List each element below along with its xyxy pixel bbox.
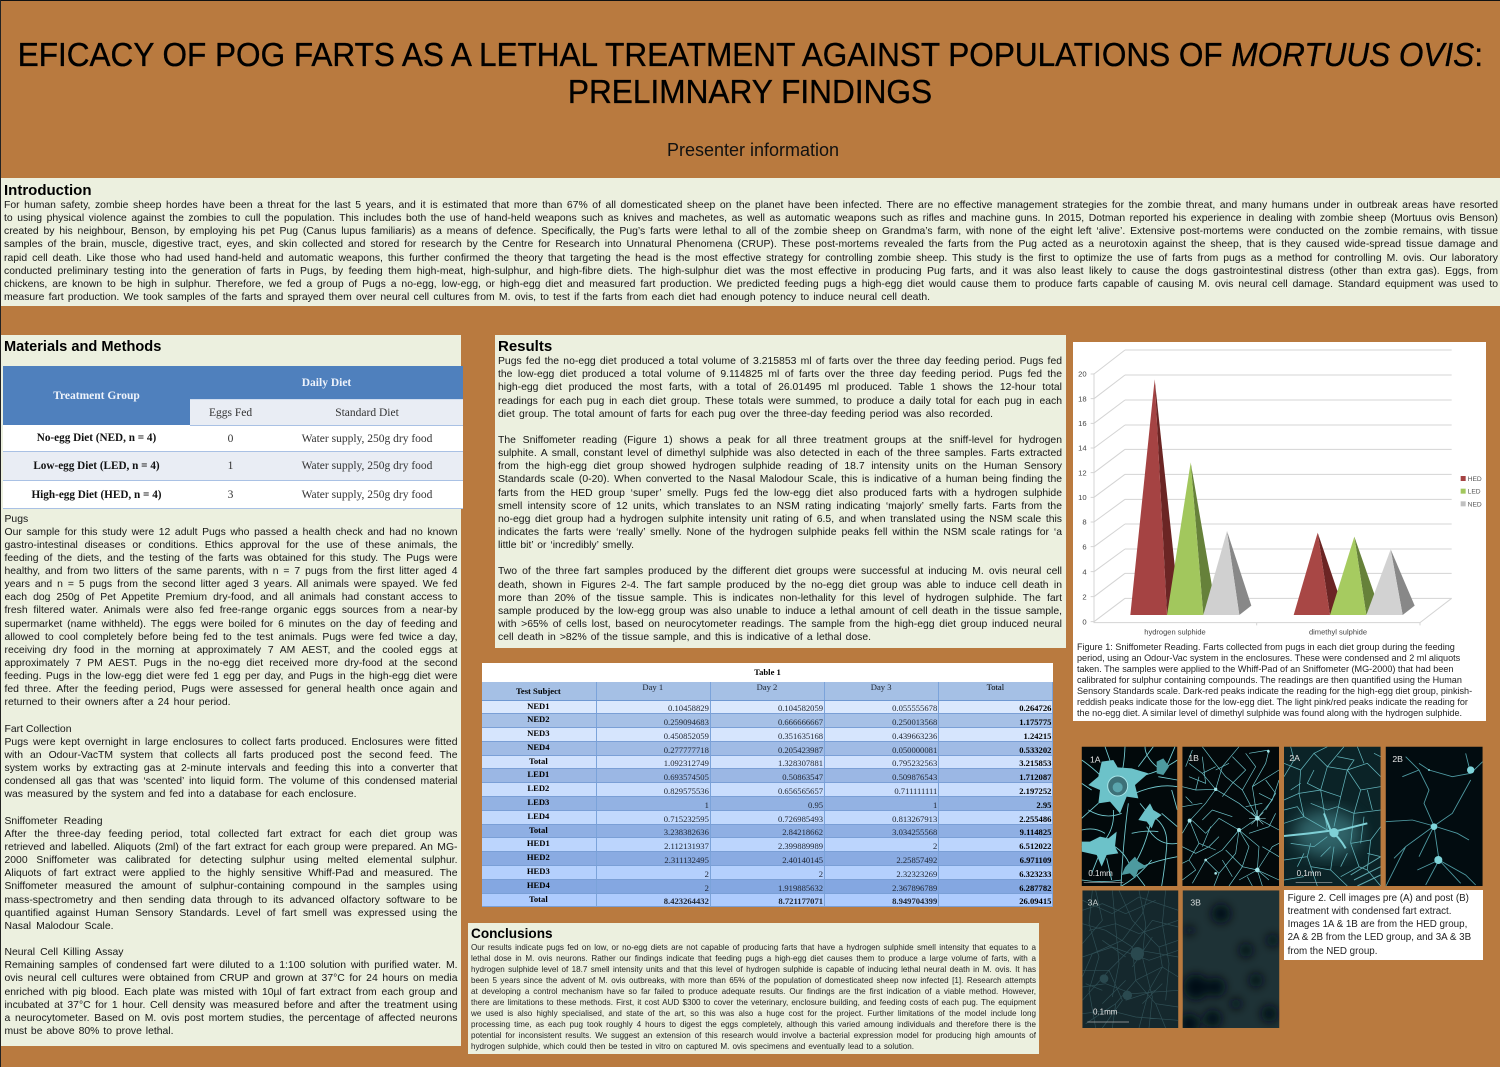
- table 1: readings: HED2: [527, 852, 550, 862]
- figure 2 caption: Images 1A & 1B are from the HED group,: [1288, 919, 1467, 930]
- table 1: readings: 1.24215: [1024, 731, 1051, 741]
- table 1: readings: 0.277777718: [664, 745, 709, 755]
- image 2A: 2A: [1289, 753, 1300, 763]
- axis labels: [1078, 370, 1087, 626]
- table 1: readings: Test Subject: [516, 686, 561, 696]
- table: treatment groups: Water supply, 250g dry food: [302, 432, 432, 444]
- table 1: readings: 0.264726: [1019, 703, 1051, 713]
- category labels: [1144, 627, 1367, 636]
- text: methods body: retrieved and labelled. Aliquots (2ml) of the fart extract for each group were prepared. An MG-: [4, 842, 458, 853]
- table 1: readings: Day 2: [757, 682, 777, 692]
- axis labels: 4: [1082, 567, 1087, 576]
- table 1: readings: 2.197252: [1019, 786, 1051, 796]
- image 3B: [1182, 890, 1280, 1028]
- text: methods body: Pugs were kept overnight in large enclosures to collect farts produced. Enclosures were fitted: [4, 737, 458, 748]
- text: results body: sulphite. A small, constant level of dimethyl sulphide was also detected in each of the three samples. Farts extracted: [498, 448, 1062, 459]
- table 1: readings: NED1: [527, 700, 550, 710]
- text: results body: death, shown in Figures 2-4. The fart sample produced by the no-egg diet group was able to induce cell death in: [498, 580, 1062, 591]
- table 1: readings: 8.423264432: [664, 896, 709, 906]
- axis labels: 2: [1082, 592, 1087, 601]
- axis labels: 6: [1082, 542, 1087, 551]
- table 1: readings: 0.711111111: [894, 786, 937, 796]
- axis labels: 20: [1078, 370, 1087, 379]
- table 1: readings: HED3: [527, 866, 550, 876]
- table 1: readings: 6.512022: [1019, 841, 1051, 851]
- text: results body: Pugs fed the no-egg diet produced a total volume of 3.215853 ml of farts over the three day feeding period. Pugs fed: [498, 356, 1062, 367]
- table 1: readings: 0.95: [808, 800, 823, 810]
- text: methods body: Pugs: [4, 514, 28, 524]
- pyramids: hydrogen sulphide: [1130, 379, 1251, 615]
- table 1: readings: LED2: [527, 783, 549, 793]
- table 1: readings: 2: [819, 869, 823, 879]
- text: methods body: Fart Collection: [4, 724, 72, 735]
- text: methods body: allowed to cool completely before being fed to the test animals. Pugs were fed twice a day,: [4, 632, 458, 643]
- table 1: readings: LED1: [527, 769, 549, 779]
- figure 1 caption: reddish peaks indicate those for the low-egg diet. The light pink/red peaks indicate the reading for: [1077, 697, 1468, 707]
- table 1: readings: LED3: [527, 797, 549, 807]
- table 1: readings: 6.287782: [1019, 883, 1051, 893]
- text: methods body: incubated at 37°C for 1 hour. Cell density was measured before and after the treatment using: [4, 1000, 458, 1011]
- text: results body: Two of the three fart samples produced by the different diet groups were successful at inducing M. ovis neural cell: [498, 566, 1062, 577]
- text: conclusions body: we used is also highly specialised, and state of the art, so this was also a huge cost for the project. Further limitations of the model include long: [471, 1009, 1036, 1018]
- text: methods body: supermarket (name withheld). The eggs were boiled for 6 minutes on the day of feeding and: [4, 619, 458, 630]
- table 1: readings: 2: [705, 869, 709, 879]
- text: introduction body: measure fart production. We took samples of the farts and sprayed them over neural cell cultures from M. ovis, to test if the farts from each diet had enough potency to induce neural cell death.: [4, 292, 930, 303]
- figure 1 caption: calibrated for sulphur containing compounds. The readings are then quantified using the Human: [1077, 675, 1462, 685]
- text: methods body: receiving dry food in the morning at approximately 7 AM AEST, and the cooled eggs at: [4, 645, 458, 656]
- text: methods body: Our sample for this study were 12 adult Pugs who passed a health check and had no known: [4, 527, 458, 538]
- table: treatment groups: No-egg Diet (NED, n = 4): [37, 432, 156, 444]
- image 2B: 2B: [1392, 754, 1403, 764]
- text: results body: the low-egg diet produced a total volume of 9.114825 ml of farts over the three day feeding period. Pugs fed the: [498, 369, 1062, 380]
- text: introduction body: to using physical violence against the zombies to cull the population. This includes both the use of hand-held weapons such as knives and machetes, as well as automatic weapons such as rifles and machine guns. In 2015, Dotman reported his experience in dealing with zombie sheep (Mortuus ovis Benson): [4, 213, 1498, 224]
- table 1: readings: 26.09415: [1019, 896, 1051, 906]
- table: treatment groups: 3: [228, 488, 233, 500]
- table: treatment groups: Water supply, 250g dry food: [302, 488, 432, 500]
- figure 2: neuron micrographs: [1082, 746, 1483, 1028]
- text: introduction body: [4, 200, 1498, 303]
- text: methods body: Remaining samples of condensed fart were diluted to a 1:100 solution with purified water. M.: [4, 960, 458, 971]
- image 3A: 3A: [1088, 897, 1098, 907]
- table 1: readings: 6.323233: [1019, 869, 1051, 879]
- table: treatment groups: 0: [228, 432, 233, 444]
- text: methods body: Neural Cell Killing Assay: [4, 947, 124, 958]
- table 1: readings: 2.399889989: [778, 841, 823, 851]
- text: methods body: enriched with pig blood. Each plate was misted with 10µl of fart extract from each group and: [4, 987, 458, 998]
- table 1: readings: 0.10458829: [668, 703, 709, 713]
- table 1 title: Table 1: [754, 667, 781, 677]
- table 1: readings: 2.84218662: [782, 827, 823, 837]
- title: [18, 36, 1483, 110]
- text: conclusions body: hydrogen sulphide level of 18.7 smell intensity units and that this level of hydrogen sulphide is capable of inducing lethal neural death in M. ovis. It has: [471, 965, 1036, 974]
- figure 2 caption: treatment with condensed fart extract.: [1288, 906, 1452, 917]
- pyramids: dimethyl sulphide: [1294, 533, 1415, 615]
- table 1: readings: 0.726985493: [778, 814, 823, 824]
- text: conclusions body: Our results indicate pugs fed on low, or no-egg diets are not capable of producing farts that have a hydrogen sulphide smell intensity that equates to a: [471, 943, 1036, 952]
- text: conclusions body: at developing a control mechanism have so far failed to produce adequate results. Our findings are the first indication of a viable method. However,: [471, 987, 1036, 996]
- axis labels: 10: [1078, 493, 1087, 502]
- text: methods body: [4, 514, 458, 1037]
- table 1: readings: 2.95: [1036, 800, 1051, 810]
- text: methods body: was measured by the system and fed into a database for each enclosure.: [4, 789, 356, 800]
- text: methods body: gastro-intestinal diseases or conditions. Ethics approval for the use of these animals, the: [4, 540, 458, 551]
- panel: materials and methods: [1, 335, 461, 1046]
- table 1: readings: 0.450852059: [664, 731, 709, 741]
- text: introduction body: For human safety, zombie sheep hordes have been a threat for the last 5 years, and it is estimated that more than 67% of all domesticated sheep on the planet have been infected. There are no effective management strategies for the zombie threat, and many humans under in outbreak areas have resorted: [4, 200, 1498, 211]
- table 1: readings: 0.50863547: [782, 772, 823, 782]
- text: results body: high-egg diet produced the most farts, with a total of 26.01495 ml produced. Table 1 shows the 12-hour total: [498, 382, 1062, 393]
- table: treatment groups: Water supply, 250g dry food: [302, 460, 432, 472]
- table 1: readings: 0.533202: [1019, 745, 1051, 755]
- table 1: readings: 0.439663236: [892, 731, 937, 741]
- text: results body: farts from the HED group ‘super’ smelly. Pugs fed the low-egg diet also produced farts with a hydrogen sulphide: [498, 488, 1062, 499]
- image 2A: [1284, 746, 1381, 886]
- table 1: readings: Total: [529, 756, 548, 766]
- table 1: readings: LED4: [527, 811, 549, 821]
- table 1: readings: 1.712087: [1019, 772, 1051, 782]
- text: results body: indicates the farts were ‘really’ smelly. None of the hydrogen sulphide peaks fell within the NSM scale ratings for ‘a: [498, 527, 1062, 538]
- text: methods body: years and n = 5 pugs from the second litter aged 3 years. All animals were spayed. We fed: [4, 579, 458, 590]
- legend: [1461, 476, 1482, 508]
- text: introduction body: conducted preliminary testing into the generation of farts in Pugs, by feeding them high-meat, high-sulphur, and high-fibre diets. The high-sulphur diet was the most effective in producing Pug farts, and it was also least likely to cause the dogs gastrointestinal distress (other than extra gas). Eggs, from: [4, 266, 1498, 277]
- page frame lines: [0, 0, 1500, 1]
- image 1A: [1082, 746, 1178, 886]
- image 1B: [1182, 746, 1279, 886]
- text: results body: [498, 356, 1062, 643]
- image 1B: 1B: [1188, 753, 1199, 763]
- text: conclusions body: been 5 years since the advent of M. ovis outbreaks, with more than 65% of the population of domesticated sheep now infected [1]. Research attempts: [471, 976, 1036, 985]
- table 1: readings: HED1: [527, 838, 550, 848]
- image 1A: 0.1mm: [1088, 869, 1113, 878]
- table: treatment groups: Eggs Fed: [209, 406, 252, 418]
- image 2A: 0.1mm: [1297, 869, 1321, 878]
- image 2B: [1386, 746, 1483, 886]
- axis labels: 18: [1078, 394, 1087, 403]
- title: PRELIMNARY FINDINGS: [568, 73, 932, 110]
- figure 2 caption: 2A & 2B from the LED group, and 3A & 3B: [1288, 932, 1471, 943]
- table: treatment groups: Daily Diet: [302, 377, 351, 389]
- figure 1 caption: Figure 1: Sniffometer Reading. Farts collected from pugs in each diet group during the feeding: [1077, 642, 1455, 652]
- legend: HED: [1468, 476, 1482, 483]
- table 1: readings: 2.367896789: [892, 883, 937, 893]
- legend: LED: [1468, 489, 1481, 496]
- table 1: readings: 0.205423987: [778, 745, 823, 755]
- text: methods body: feeding of the diets, and the testing of the farts was obtained for this study. The Pugs were: [4, 553, 458, 564]
- text: conclusions body: [471, 943, 1036, 1051]
- table 1: readings: 1.919885632: [778, 883, 823, 893]
- table 1: readings: 9.114825: [1020, 827, 1051, 837]
- legend: NED: [1468, 501, 1482, 508]
- text: introduction body: chickens, are known to be high in sulphur. Therefore, we fed a group of Pugs a no-egg, low-egg, or high-egg diet and measured fart production. We predicted feeding pugs a high-egg diet would cause them to produce farts capable of causing M. ovis neural cell damage. Standard equipment was used to: [4, 279, 1498, 290]
- table 1: readings: 0.055555678: [892, 703, 937, 713]
- table 1: readings: 2: [933, 841, 937, 851]
- table 1: readings: 0.050000081: [892, 745, 937, 755]
- table 1: readings: Day 1: [642, 682, 663, 692]
- table 1: readings: 3.034255568: [892, 827, 937, 837]
- table: treatment groups: Standard Diet: [335, 406, 399, 418]
- table 1: readings: 0.795232563: [892, 758, 937, 768]
- figure 2 caption: Figure 2. Cell images pre (A) and post (B): [1288, 893, 1469, 904]
- text: methods body: ovis neural cell cultures were obtained from CRUP and grown at 37°C for 24 hours on media: [4, 973, 458, 984]
- table 1: readings: 0.250013568: [892, 717, 937, 727]
- figure 1 caption: taken. The samples were applied to the Whiff-Pad of an Sniffometer (MG-2000) that had been: [1077, 664, 1453, 674]
- table 1: readings: 6.971109: [1020, 855, 1051, 865]
- axis labels: 16: [1078, 419, 1087, 428]
- text: conclusions body: processing time, as each pug took roughly 4 hours to digest the eggs completely, although this varied amoung individuals and therefore there is the: [471, 1020, 1036, 1029]
- text: methods body: quantified against Human Sensory Standards. Level of fart smell was expressed using the: [4, 908, 458, 919]
- presenter information: Presenter information: [667, 140, 839, 160]
- table 1: readings: 0.829575536: [664, 786, 709, 796]
- text: methods body: returned to their owners after a 24 hour period.: [4, 697, 230, 708]
- table 1: readings: 0.693574505: [664, 772, 709, 782]
- table 1: readings: 1.092312749: [664, 758, 709, 768]
- table 1: readings: 2.25857492: [896, 855, 937, 865]
- text: results body: cell death in >82% of the tissue sample, and this is indicative of a lethal dose.: [498, 632, 871, 643]
- table 1: readings: 3.238382636: [664, 827, 709, 837]
- table 1: readings: NED2: [527, 714, 550, 724]
- text: introduction body: samples of the brain, muscle, digestive tract, eyes, and skin collected and stored for research by the Centre for Research into Unnatural Phenomena (CRUP). These post-mortems revealed the farts from the Pug acted as a neurotoxin against the sheep, that is they caused wide-spread tissue damage and: [4, 239, 1498, 250]
- text: results body: Standards scale (0-20). When converted to the Nasal Malodour Scale, this is indicative of a human being finding the: [498, 474, 1062, 485]
- table 1: readings: 2.32323269: [896, 869, 937, 879]
- text: methods body: fresh filtered water. Animals were also fed free-range organic eggs sources from a near-by: [4, 605, 458, 616]
- image 3A: 0.1mm: [1093, 1007, 1118, 1016]
- table 1: readings: NED3: [527, 728, 550, 738]
- text: methods body: approximately 7 PM AEST. Pugs in the no-egg diet received more dry-food at the second: [4, 658, 458, 669]
- category labels: dimethyl sulphide: [1309, 627, 1367, 636]
- table 1: readings: Total: [987, 682, 1004, 692]
- table 1: readings: [482, 682, 1053, 907]
- text: methods body: Nasal Malodour Scale.: [4, 921, 114, 932]
- image 3A: [1082, 890, 1178, 1028]
- text: results body: diet group. The total amount of farts for each pug over the three-day feeding period was also recorded.: [498, 409, 993, 420]
- text: methods body: each dog 250g of Pet Appetite Premium dry-food, and all animals had constant access to: [4, 592, 458, 603]
- table 1: readings: 0.259094683: [664, 717, 709, 727]
- text: methods body: with an Odour-VacTM system that collects all farts produced post the second feed. The: [4, 750, 458, 761]
- table 1: readings: Total: [529, 894, 548, 904]
- table 1: readings: 0.666666667: [778, 717, 823, 727]
- figure 1 caption: period, using an Odour-Vac system in the enclosures. These were condensed and 2 ml aliquots: [1077, 653, 1460, 663]
- heading: materials and methods: Materials and Methods: [4, 339, 161, 355]
- text: introduction body: created by his neighbour, Benson, by employing his pet Pug (Canus lupus familiaris) as a means of defence. Specifically, the Pug’s farts were lethal to all of the zombie sheep on Grandma’s farm, with none of the eight left ‘alive’. Extensive post-mortems were conducted on the zombie remains, with tissue: [4, 226, 1498, 237]
- heading: results: Results: [498, 338, 552, 355]
- text: results body: smell intensity score of 12 units, which translates to an NSM rating indicating ‘majorly’ smelly farts. Farts from the: [498, 501, 1062, 512]
- text: methods body: mass-spectrometry and then sending data through to its advanced olfactory software to be: [4, 895, 458, 906]
- text: results body: little bit’ or ‘incredibly’ smelly.: [498, 540, 634, 551]
- table 1: readings: 2.311132495: [664, 855, 709, 865]
- table 1: readings: 0.715232595: [664, 814, 709, 824]
- text: introduction body: rapid cell death. Like those who had used hand-held and automatic weapons, this further confirmed the theory that targeting the head is the most effective strategy for controlling zombie sheep. This study is the first to optimize the use of farts from pugs as a method for controlling M. ovis. Our laboratory: [4, 253, 1498, 264]
- text: methods body: feeding. Pugs in the low-egg diet were fed 1 egg per day, and Pugs in the high-egg diet were: [4, 671, 458, 682]
- heading: conclusions: Conclusions: [471, 926, 553, 941]
- table 1: readings: Day 3: [871, 682, 892, 692]
- table 1: readings: 1: [705, 800, 709, 810]
- text: results body: sample produced by the low-egg group was also unable to induce a lethal amount of cell death in the tissue sample,: [498, 606, 1062, 617]
- table 1: readings: Total: [529, 825, 548, 835]
- figure 2 caption: from the NED group.: [1288, 946, 1377, 957]
- text: conclusions body: potential for inconsistent results. We suggest an extension of this research would involve a bacterial expression model for producing high amounts of: [471, 1031, 1036, 1040]
- table 1: readings: 3.215853: [1019, 758, 1051, 768]
- table 1: readings: 0.509876543: [892, 772, 937, 782]
- title: EFICACY OF POG FARTS AS A LETHAL TREATMENT AGAINST POPULATIONS OF MORTUUS OVIS:: [18, 36, 1483, 73]
- table 1: readings: 0.813267913: [892, 814, 937, 824]
- figure 1 caption: Sensory Standards scale. Dark-red peaks indicate the reading for the high-egg diet group, pinkish-: [1077, 686, 1472, 696]
- text: methods body: must be above 80% to prove lethal.: [4, 1026, 174, 1037]
- text: methods body: system works by extracting gas at 2-minute intervals and feeding this into a converter that: [4, 763, 458, 774]
- table: treatment groups: High-egg Diet (HED, n = 4): [31, 488, 162, 500]
- image 3B: 3B: [1190, 898, 1201, 908]
- axis labels: 12: [1078, 468, 1087, 477]
- axis labels: 14: [1078, 444, 1087, 453]
- text: methods body: a neurocytometer. Based on M. ovis post mortem studies, the percentage of affected neurons: [4, 1013, 458, 1024]
- table 1: readings: 2: [705, 883, 709, 893]
- table 1: readings: 8.721177071: [778, 896, 823, 906]
- text: methods body: Sniffometer measured the amount of sulphur-containing compound in the samples using: [4, 881, 458, 892]
- heading: introduction: Introduction: [4, 182, 91, 199]
- table: treatment groups: Treatment Group: [53, 390, 140, 402]
- panel: introduction: [1, 178, 1500, 306]
- table 1: readings: 0.656565657: [778, 786, 823, 796]
- text: results body: readings for each pug in each diet group. These totals were summed, to produce a daily total for each pug in each: [498, 396, 1062, 407]
- table 1: readings: NED4: [527, 742, 550, 752]
- table 1: readings: 1: [933, 800, 937, 810]
- chart: sniffometer 3D pyramids: [1078, 350, 1482, 636]
- text: conclusions body: lethal dose in M. ovis neurons. Rather our findings indicate that feeding pugs a high-egg diet causes them to produce a large volume of farts, with a: [471, 954, 1036, 963]
- axis labels: 0: [1082, 617, 1087, 626]
- text: methods body: Aliquots of fart extract were applied to the highly sensitive Whiff-Pad and measured. The: [4, 868, 458, 879]
- table: treatment groups: Low-egg Diet (LED, n = 4): [33, 460, 160, 472]
- text: methods body: After the three-day feeding period, total collected fart extract for each diet group was: [4, 829, 458, 840]
- table: treatment groups: 1: [228, 460, 233, 472]
- image 1A: 1A: [1090, 754, 1101, 764]
- text: methods body: Sniffometer Reading: [4, 816, 102, 827]
- table: treatment groups: [3, 366, 463, 508]
- table 1: readings: 1.175775: [1019, 717, 1051, 727]
- text: results body: no-egg diet group had a hydrogen sulphite intensity unit rating of 6.5, and when translated using the NSM scale this: [498, 514, 1062, 525]
- panel: figure 1 chart and caption: [1073, 342, 1486, 721]
- text: results body: The Sniffometer reading (Figure 1) shows a peak for all three treatment groups at the sniff-level for hydrogen: [498, 435, 1062, 446]
- text: results body: from the high-egg diet group showed hydrogen sulphide reading of 18.7 intensity units on the Human Sensory: [498, 461, 1062, 472]
- table 1: readings: 8.949704399: [892, 896, 937, 906]
- text: conclusions body: there are limitations to these methods. First, it cost AUD $300 to cover the veterinary, enclosure building, and feeding costs of each pug. The equipment: [471, 998, 1036, 1007]
- table 1: readings: HED4: [527, 880, 550, 890]
- text: methods body: healthy, and from two litters of the same parents, with n = 7 pugs from the first litter aged 4: [4, 566, 458, 577]
- table 1 title: [482, 663, 1053, 682]
- figure 1 caption: the no-egg diet. A similar level of dimethyl sulphide was found along with the hydrogen sulphide.: [1077, 708, 1462, 718]
- table 1: readings: 0.104582059: [778, 703, 823, 713]
- text: conclusions body: hydrogen sulphide, which could then be tested in vitro on captured M. ovis specimens and eventually lead to a solution.: [471, 1042, 914, 1051]
- table 1: readings: 2.255486: [1019, 814, 1051, 824]
- figure 2 caption: [1284, 890, 1483, 960]
- text: methods body: condensed all gas that was ‘scented’ into liquid form. The volume of this condensed material: [4, 776, 458, 787]
- text: methods body: 2000 Sniffometer was calibrated for detecting sulphur using melted elemental sulphur.: [4, 855, 458, 866]
- text: results body: with >65% of cells lost, based on neurocytometer readings. The sample from the high-egg diet group induced neural: [498, 619, 1062, 630]
- table 1: readings: 2.112131937: [664, 841, 709, 851]
- table 1: readings: 1.328307881: [778, 758, 823, 768]
- figure 1 caption: [1077, 642, 1472, 718]
- table 1: readings: 0.351635168: [778, 731, 823, 741]
- text: methods body: fed three. After the feeding period, Pugs were assessed for general health once again and: [4, 684, 458, 695]
- category labels: hydrogen sulphide: [1144, 627, 1206, 636]
- table 1: readings: 2.40140145: [782, 855, 823, 865]
- panel: conclusions: [468, 923, 1039, 1054]
- panel: results: [495, 335, 1066, 648]
- text: results body: more than 20% of the tissue sample. This is indicates non-lethality for this level of hydrogen sulphide. The fart: [498, 593, 1062, 604]
- axis labels: 8: [1082, 518, 1087, 527]
